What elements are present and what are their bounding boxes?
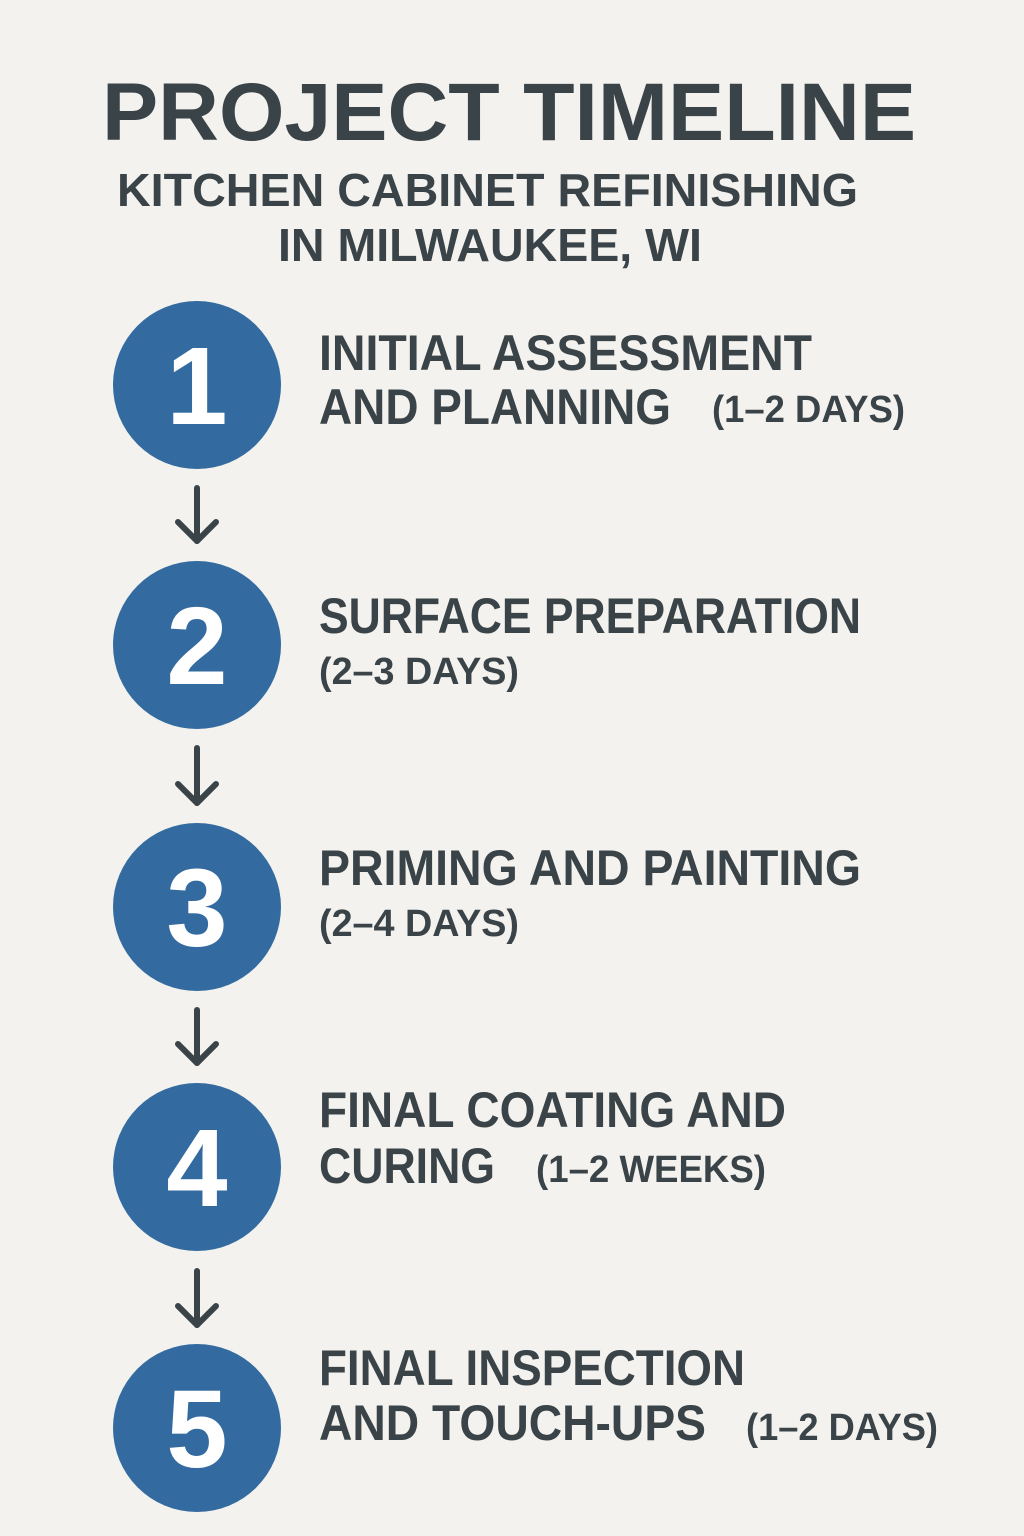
step 1: INITIAL ASSESSMENT: [319, 325, 812, 381]
subtitle: IN MILWAUKEE, WI: [278, 219, 702, 271]
step 2: (2–3 DAYS): [319, 651, 519, 693]
step 4: CURING: [319, 1138, 495, 1194]
step 1: [113, 301, 905, 469]
step 5: [113, 1340, 938, 1512]
step 1: AND PLANNING: [319, 379, 671, 435]
arrow 2: [178, 748, 216, 803]
subtitle: [117, 164, 858, 271]
step 5: 5: [166, 1368, 228, 1491]
step 1: 1: [166, 325, 228, 448]
arrow 4: [178, 1271, 216, 1325]
title: PROJECT TIMELINE: [102, 67, 916, 158]
arrow 1: [178, 488, 216, 541]
step 4: 4: [166, 1107, 228, 1230]
step 3: [113, 823, 861, 991]
step 1: (1–2 DAYS): [712, 389, 905, 431]
step 3: (2–4 DAYS): [319, 903, 519, 945]
step 5: (1–2 DAYS): [746, 1407, 938, 1449]
step 2: 2: [166, 585, 228, 708]
subtitle: KITCHEN CABINET REFINISHING: [117, 164, 858, 216]
step 3: PRIMING AND PAINTING: [319, 840, 861, 896]
step 4: FINAL COATING AND: [319, 1082, 786, 1138]
step 4: (1–2 WEEKS): [536, 1149, 766, 1191]
step 2: [113, 561, 861, 729]
step 2: SURFACE PREPARATION: [319, 588, 861, 644]
step 5: FINAL INSPECTION: [319, 1340, 745, 1396]
step 5: AND TOUCH-UPS: [319, 1395, 706, 1451]
step 4: [113, 1082, 786, 1251]
step 3: 3: [166, 847, 228, 970]
arrow 3: [178, 1010, 216, 1063]
